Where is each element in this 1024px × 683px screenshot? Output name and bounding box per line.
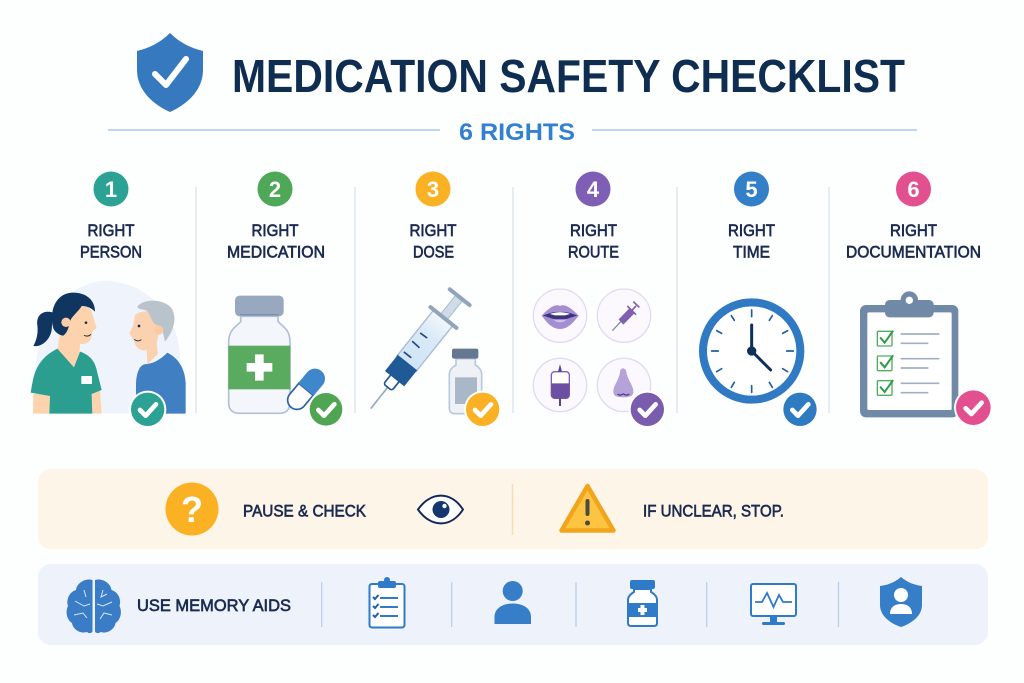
column 2: right medication	[227, 172, 344, 428]
panel: memory aids	[38, 564, 988, 645]
icon: nose	[597, 358, 651, 412]
number badge 5	[734, 172, 769, 206]
icon: IV bag	[533, 358, 587, 412]
icon: question mark: ?	[181, 489, 203, 530]
heading: right route: ROUTE	[568, 244, 619, 262]
title: MEDICATION SAFETY CHECKLIST	[232, 50, 905, 102]
heading: right time	[728, 222, 775, 262]
heading: right time: TIME	[733, 244, 770, 262]
heading: right medication	[227, 222, 325, 262]
text: use memory aids: USE MEMORY AIDS	[137, 596, 291, 615]
panel: pause and check	[38, 469, 988, 550]
heading: right dose	[410, 222, 456, 262]
heading: right medication: MEDICATION	[227, 244, 325, 262]
column 6: right documentation	[846, 172, 993, 427]
icon: medicine bottle	[628, 580, 657, 626]
icon: shield with check	[137, 33, 203, 112]
icons: four routes	[533, 289, 651, 412]
illustration: clipboard	[860, 291, 958, 417]
check badge	[464, 391, 501, 428]
number badge 1: 1	[105, 177, 117, 202]
heading: right route: RIGHT	[570, 222, 617, 240]
check badge	[954, 388, 993, 427]
number badge 4	[576, 172, 610, 206]
text: pause and check: PAUSE & CHECK	[243, 502, 367, 520]
subtitle: 6 rights: 6 RIGHTS	[459, 119, 575, 146]
column 1: right person	[31, 172, 186, 428]
icon: checklist	[370, 577, 404, 628]
number badge 4: 4	[587, 177, 600, 202]
number badge 2	[258, 172, 292, 206]
column 3: right dose	[358, 172, 501, 428]
check badge	[629, 391, 666, 428]
heading: right person: PERSON	[80, 244, 142, 262]
icon: injection	[597, 289, 651, 342]
illustration: nurse and patient	[31, 281, 186, 414]
icon: warning triangle	[562, 486, 614, 530]
number badge 3	[416, 172, 450, 206]
heading: right dose: RIGHT	[410, 222, 456, 240]
heading: right time: RIGHT	[728, 222, 775, 240]
check badge	[308, 391, 344, 428]
heading: right documentation: RIGHT	[890, 222, 937, 240]
icon: person	[494, 581, 531, 624]
icon: shield with person	[880, 577, 922, 627]
icon: eye	[418, 496, 463, 523]
heading: right dose: DOSE	[413, 244, 454, 262]
illustration: bottle and capsule	[228, 296, 329, 414]
heading: right documentation	[846, 222, 981, 262]
number badge 1	[94, 172, 128, 206]
number badge 6: 6	[907, 177, 920, 202]
column 4: right route	[533, 172, 666, 428]
number badge 2: 2	[269, 177, 281, 202]
heading: right person: RIGHT	[88, 222, 134, 240]
heading: right documentation: DOCUMENTATION	[846, 244, 981, 262]
text: if unclear stop: IF UNCLEAR, STOP.	[643, 502, 784, 520]
heading: right medication: RIGHT	[252, 222, 298, 240]
number badge 6	[896, 172, 931, 206]
icon: heart monitor	[751, 584, 796, 625]
icon: question mark	[166, 482, 218, 536]
check badge	[129, 391, 166, 428]
check badge	[781, 391, 819, 428]
icon: brain	[67, 580, 121, 633]
illustration: syringe and vial	[358, 287, 482, 419]
heading: right person	[80, 222, 142, 262]
icon: mouth	[533, 289, 587, 342]
illustration: clock	[703, 302, 800, 400]
number badge 3: 3	[427, 177, 439, 202]
number badge 5: 5	[745, 177, 758, 202]
column 5: right time	[703, 172, 819, 428]
heading: right route	[568, 222, 619, 262]
